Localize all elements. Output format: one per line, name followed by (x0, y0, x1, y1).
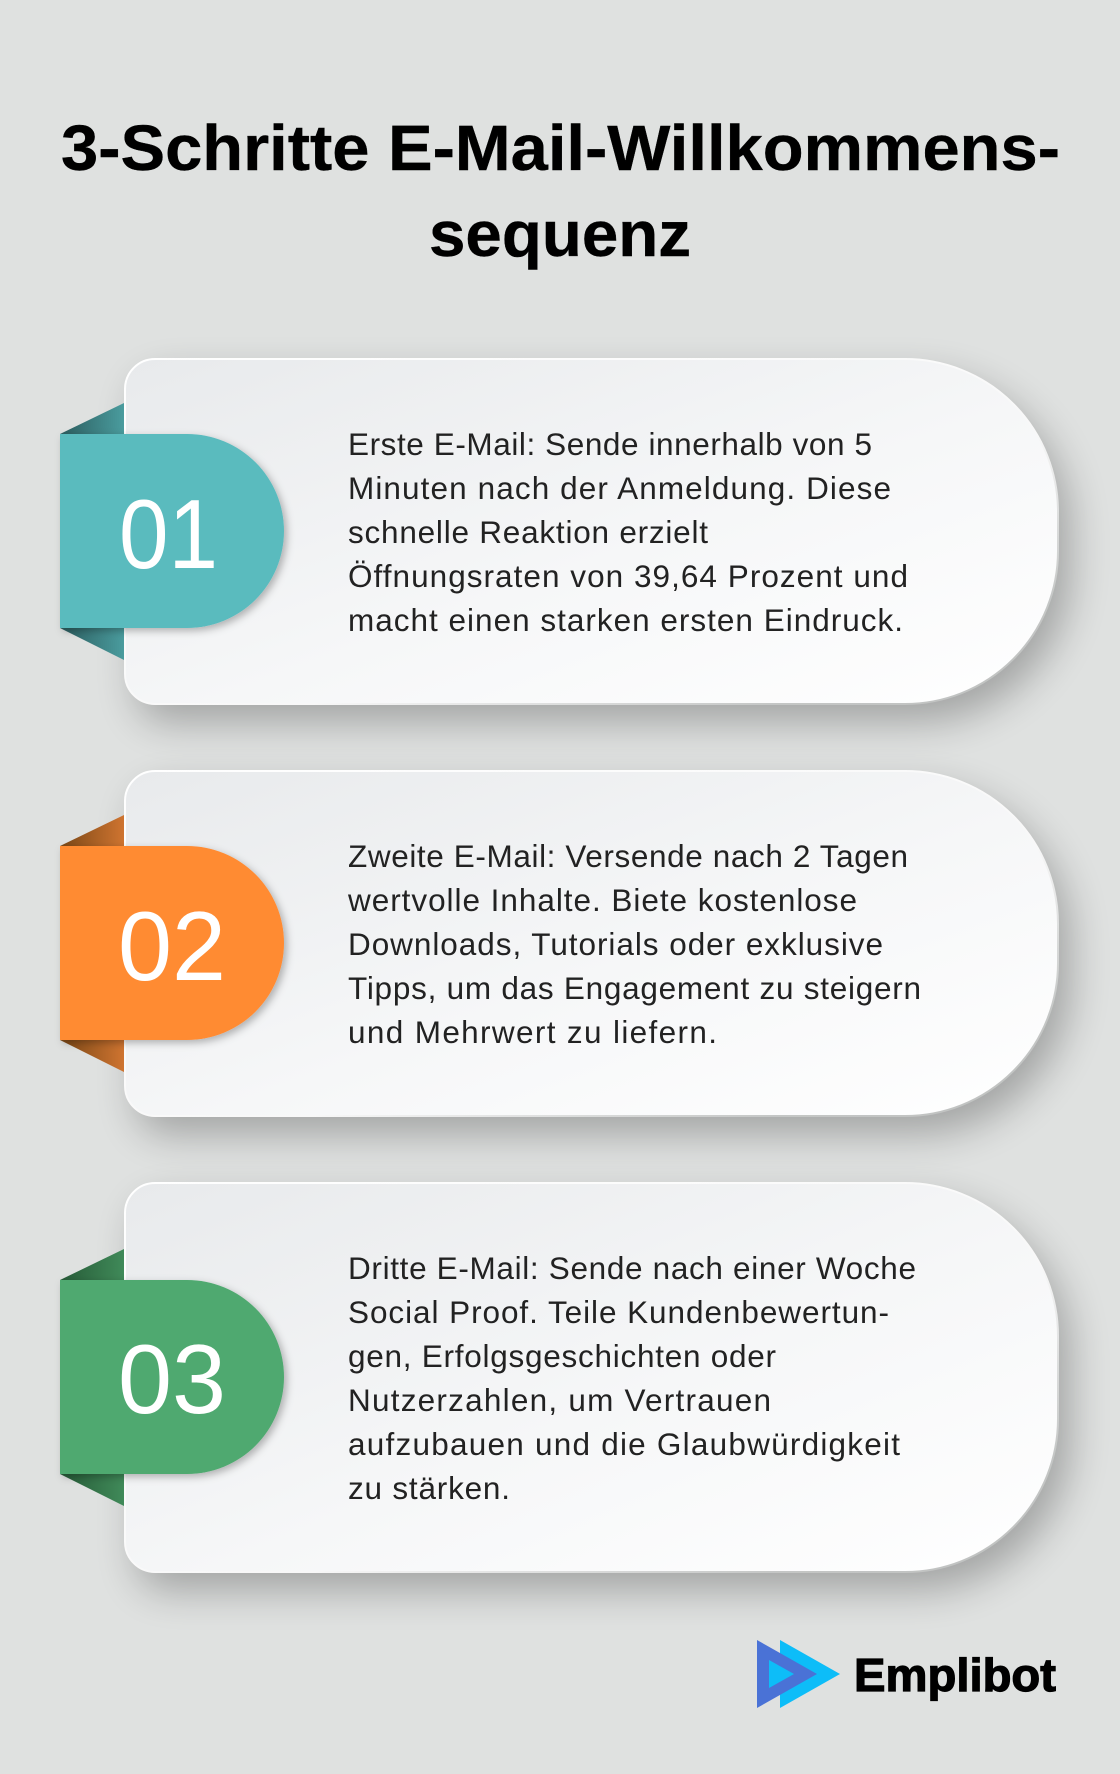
text: step 3: Social Proof. Teile Kundenbewertun- (348, 1294, 889, 1330)
number badge 01 (60, 434, 284, 628)
ribbon fold bottom 3 (60, 1474, 124, 1506)
card shadow 3 (137, 1201, 1070, 1590)
text: step 3 (348, 1250, 916, 1506)
logo wordmark: Emplibot (854, 1649, 1056, 1701)
text: step 3: Nutzerzahlen, um Vertrauen (348, 1382, 771, 1418)
icon: play triangles (757, 1640, 840, 1708)
title (61, 112, 1060, 270)
number badge 02 (60, 846, 284, 1040)
number badge 03 (60, 1280, 284, 1474)
text: step 1: Minuten nach der Anmeldung. Diese (348, 470, 891, 506)
panel: step 1 (60, 359, 1070, 722)
card 3 (125, 1183, 1058, 1572)
text: step 1: macht einen starken ersten Eindruck. (348, 602, 903, 638)
text: step 3: zu stärken. (348, 1470, 510, 1506)
text: step 2: Downloads, Tutorials oder exklusive (348, 926, 883, 962)
ribbon fold top 1 (60, 403, 124, 434)
card shadow 2 (137, 789, 1070, 1134)
text: step 1: Erste E-Mail: Sende innerhalb von 5 (348, 426, 872, 462)
text: step 1 (348, 426, 908, 638)
title: 3-Schritte E-Mail-Willkommens- (61, 112, 1060, 184)
number badge 03: 03 (118, 1324, 226, 1434)
panel: step 2 (60, 771, 1070, 1134)
text: step 3: aufzubauen und die Glaubwürdigkeit (348, 1426, 900, 1462)
ribbon fold top 3 (60, 1249, 124, 1280)
text: step 1: schnelle Reaktion erzielt (348, 514, 708, 550)
card 2 (125, 771, 1058, 1116)
text: step 3: Dritte E-Mail: Sende nach einer Woche (348, 1250, 916, 1286)
text: step 2: Tipps, um das Engagement zu steigern (348, 970, 921, 1006)
text: step 2 (347, 838, 921, 1050)
panel: step 3 (60, 1183, 1070, 1590)
ribbon fold top 2 (60, 815, 124, 846)
text: step 1: Öffnungsraten von 39,64 Prozent und (348, 558, 908, 594)
text: step 2: und Mehrwert zu liefern. (348, 1014, 717, 1050)
text: step 3: gen, Erfolgsgeschichten oder (348, 1338, 776, 1374)
ribbon fold bottom 2 (60, 1040, 124, 1072)
card shadow 1 (137, 377, 1070, 722)
text: step 2: Zweite E-Mail: Versende nach 2 Tagen (348, 838, 908, 874)
number badge 02: 02 (118, 891, 226, 1001)
text: step 2: wertvolle Inhalte. Biete kostenlose (347, 882, 857, 918)
number badge 01: 01 (119, 479, 218, 589)
title: sequenz (429, 198, 691, 270)
logo: Emplibot (757, 1640, 1056, 1708)
ribbon fold bottom 1 (60, 628, 124, 660)
card 1 (125, 359, 1058, 704)
